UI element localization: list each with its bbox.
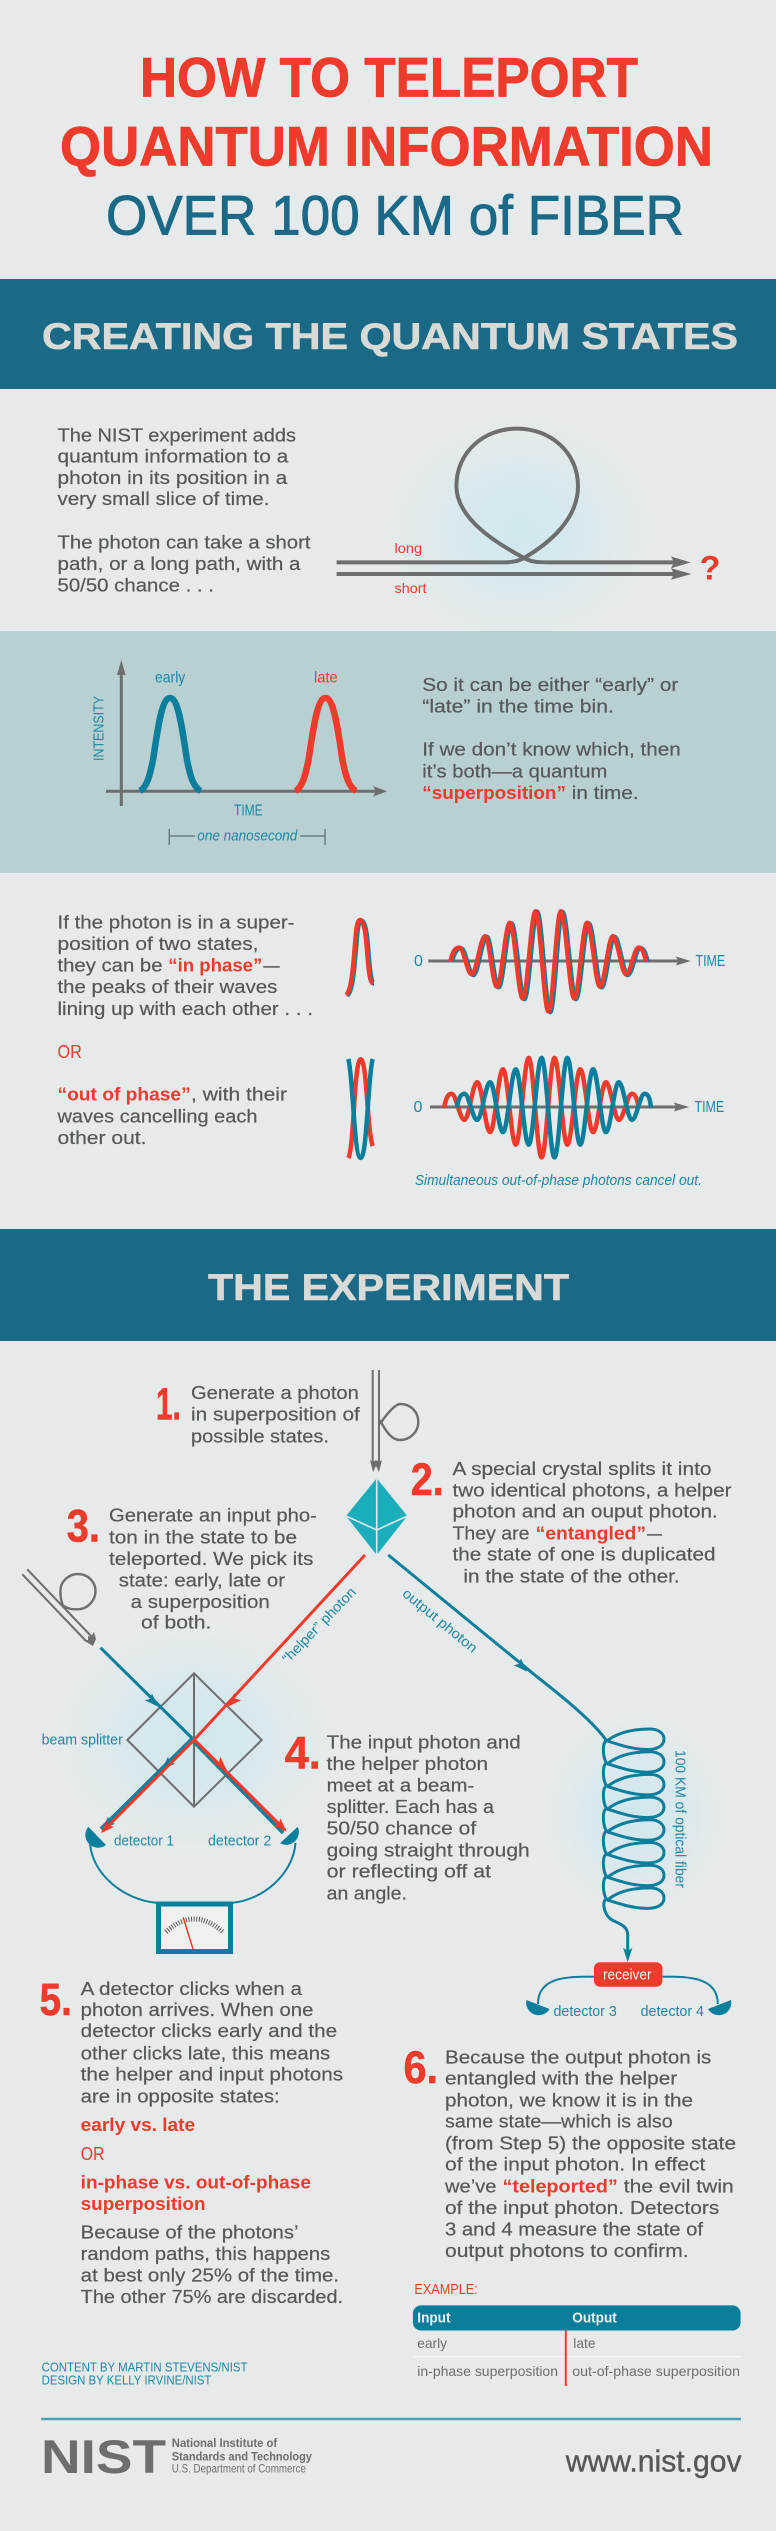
section heading: the experiment — [0, 1229, 776, 1341]
step 4: The input photon and — [327, 1731, 521, 1752]
step 5: early vs. late — [81, 2114, 195, 2135]
step 5: in-phase vs. out-of-phase — [81, 2171, 311, 2192]
step 6: the evil twin — [624, 2175, 734, 2196]
footer logo: NIST: NIST — [41, 2430, 166, 2483]
step 6: “teleported” — [502, 2175, 618, 2196]
text block: in phase or out of phase: If the photon is in a super- — [58, 912, 294, 932]
chart: intensity over time: late — [314, 669, 338, 686]
step 1: in superposition of — [191, 1404, 361, 1425]
step 4: 4. — [285, 1727, 321, 1778]
icon: source loop and arrows to crystal — [370, 1370, 418, 1472]
section heading: creating the quantum states — [0, 279, 776, 389]
title: QUANTUM INFORMATION — [60, 114, 713, 177]
icon: in-phase single peak — [346, 920, 374, 996]
footer url: www.nist.gov — [565, 2443, 742, 2478]
step 2: A special crystal splits it into — [452, 1458, 712, 1479]
step 4: going straight through — [327, 1839, 530, 1860]
text block: NIST experiment intro: quantum information to a — [58, 446, 289, 467]
panel: early or late time bin — [0, 631, 776, 873]
diagram: long and short paths: long — [394, 540, 422, 556]
example table: in-phase superposition — [417, 2363, 558, 2379]
glow: fiber coil — [535, 1705, 735, 1925]
step 5: OR — [81, 2143, 104, 2164]
text block: NIST experiment intro: The photon can take a short — [58, 532, 310, 553]
chart: out-of-phase wave — [414, 1058, 724, 1157]
receiver with detectors 3 and 4: detector 3 — [554, 2003, 617, 2020]
step 1: 1. — [156, 1378, 181, 1429]
example table: late — [573, 2335, 596, 2351]
text block: in phase or out of phase: position of two states, — [58, 933, 258, 954]
chart: intensity over time: TIME — [234, 803, 263, 820]
text block: in phase or out of phase: they can be — [58, 955, 162, 976]
text block: superposition in time — [422, 674, 681, 803]
text block: in phase or out of phase: “out of phase” — [58, 1084, 191, 1105]
text block: in phase or out of phase: lining up with each other . . . — [58, 998, 313, 1019]
step 5: The other 75% are discarded. — [81, 2286, 343, 2307]
step 4 — [285, 1727, 530, 1903]
text block: superposition in time: If we don’t know which, then — [422, 738, 681, 760]
step 5: superposition — [81, 2193, 206, 2214]
chart: intensity over time: early — [155, 669, 185, 686]
credits: DESIGN BY KELLY IRVINE/NIST — [42, 2372, 211, 2387]
step 6: 6. — [404, 2042, 438, 2093]
arrow: reflected photon to detector 2 — [194, 1740, 287, 1832]
step 5: Because of the photons’ — [81, 2222, 298, 2243]
icon: input photon source — [22, 1569, 96, 1646]
step 6: of the input photon. In effect — [445, 2154, 705, 2175]
chart: out-of-phase wave: 0 — [414, 1099, 423, 1116]
receiver with detectors 3 and 4 — [526, 1962, 731, 2020]
arrow: input photon path — [100, 1648, 283, 1833]
detectors 1 and 2 with wiring: detector 2 — [208, 1832, 271, 1849]
diagram: long and short paths: short — [394, 580, 427, 596]
step 4: the helper photon — [327, 1753, 488, 1774]
icon: crystal — [346, 1478, 407, 1555]
chart: in-phase wave: 0 — [414, 953, 423, 970]
step 6: entangled with the helper — [445, 2068, 677, 2089]
text block: NIST experiment intro — [58, 424, 310, 595]
chart: in-phase wave: TIME — [696, 953, 725, 970]
step 5: detector clicks early and the — [81, 2020, 337, 2041]
step 2: photon and an ouput photon. — [452, 1501, 718, 1522]
text block: NIST experiment intro: The NIST experiment adds — [58, 424, 296, 446]
label: beam splitter: beam splitter — [42, 1731, 123, 1748]
text block: in phase or out of phase: waves cancelling each — [56, 1106, 258, 1126]
step 3: a superposition — [131, 1591, 270, 1612]
text block: superposition in time: in time. — [572, 782, 639, 803]
step 2 — [411, 1454, 732, 1586]
example table: Output — [572, 2310, 617, 2327]
chart: intensity over time: INTENSITY — [90, 696, 107, 761]
step 6: (from Step 5) the opposite state — [445, 2132, 736, 2153]
step 5: random paths, this happens — [81, 2243, 330, 2264]
title: OVER 100 KM of FIBER — [106, 184, 684, 247]
step 4: 50/50 chance of — [327, 1818, 477, 1839]
arrow: reflected photon to detector 1 — [101, 1738, 192, 1830]
credits: CONTENT BY MARTIN STEVENS/NIST — [42, 2360, 248, 2374]
detectors 1 and 2 with wiring — [85, 1827, 299, 1903]
text block: NIST experiment intro: very small slice of time. — [58, 488, 269, 509]
credits — [42, 2360, 248, 2387]
step 2: the state of one is duplicated — [452, 1544, 716, 1565]
text block: superposition in time: “late” in the time bin. — [422, 695, 614, 716]
chart: intensity over time — [90, 660, 387, 845]
footer logo: NIST — [41, 2430, 312, 2483]
text block: in phase or out of phase — [56, 912, 313, 1148]
step 6: same state—which is also — [445, 2111, 673, 2132]
text block: in phase or out of phase: “in phase” — [168, 955, 262, 976]
text block: in phase or out of phase: , with their — [191, 1084, 287, 1105]
step 6: Because the output photon is — [445, 2046, 711, 2067]
title: HOW TO TELEPORT — [140, 46, 638, 109]
diagram: 100 km fiber coil: 100 KM of optical fiber — [672, 1750, 688, 1888]
step 1: Generate a photon — [191, 1382, 359, 1403]
text block: superposition in time: So it can be either “early” or — [422, 674, 678, 695]
receiver with detectors 3 and 4: receiver — [603, 1966, 652, 1983]
step 6: photon, we know it is in the — [445, 2089, 693, 2110]
step 5: A detector clicks when a — [81, 1978, 303, 1999]
step 5: 5. — [40, 1974, 72, 2025]
step 1 — [156, 1378, 361, 1446]
step 3: teleported. We pick its — [109, 1548, 313, 1569]
example table: Input — [417, 2310, 450, 2327]
step 4: an angle. — [327, 1882, 407, 1903]
icon: meter — [158, 1904, 230, 1952]
chart: out-of-phase wave: TIME — [694, 1099, 724, 1116]
icon: out-of-phase single peak — [348, 1059, 373, 1158]
step 3: Generate an input pho- — [109, 1505, 317, 1526]
step 5: photon arrives. When one — [81, 1999, 313, 2020]
arrow: helper photon path — [101, 1555, 365, 1833]
caption: out-of-phase photons cancel: Simultaneous out-of-phase photons cancel out. — [415, 1172, 702, 1189]
text block: in phase or out of phase: other out. — [58, 1127, 146, 1148]
text block: in phase or out of phase: — — [263, 955, 280, 976]
receiver with detectors 3 and 4: detector 4 — [641, 2003, 704, 2020]
text block: NIST experiment intro: path, or a long path, with a — [58, 553, 301, 574]
section heading: creating the quantum states: CREATING THE QUANTUM STATES — [42, 316, 738, 357]
step 4: meet at a beam- — [327, 1775, 474, 1796]
diagram: beam splitter — [127, 1673, 262, 1807]
text block: in phase or out of phase: OR — [58, 1041, 82, 1062]
step 6: output photons to confirm. — [445, 2240, 689, 2261]
chart: intensity over time: one nanosecond — [197, 828, 298, 845]
step 5: the helper and input photons — [81, 2064, 343, 2085]
text block: NIST experiment intro: photon in its position in a — [58, 467, 288, 488]
example table — [413, 2282, 741, 2386]
step 5: other clicks late, this means — [81, 2042, 330, 2063]
step 2: “entangled” — [536, 1522, 646, 1543]
step 5: at best only 25% of the time. — [81, 2265, 339, 2286]
step 2: They are — [452, 1522, 530, 1543]
step 4: splitter. Each has a — [327, 1796, 495, 1817]
step 5: are in opposite states: — [81, 2085, 280, 2106]
step 3: of both. — [141, 1611, 211, 1632]
step 2: 2. — [411, 1454, 444, 1505]
label: output photon: output photon — [400, 1585, 481, 1656]
step 6: of the input photon. Detectors — [445, 2197, 719, 2218]
diagram: long and short paths: ? — [700, 550, 720, 588]
step 6: we’ve — [444, 2175, 496, 2196]
example table: early — [417, 2335, 447, 2351]
text block: in phase or out of phase: the peaks of their waves — [58, 976, 277, 997]
step 3: 3. — [67, 1501, 100, 1552]
step 1: possible states. — [191, 1425, 329, 1446]
diagram: long and short paths — [337, 408, 720, 652]
step 5 — [40, 1974, 343, 2307]
glow: beam splitter — [44, 1615, 344, 1865]
text block: superposition in time: it’s both—a quantum — [422, 760, 607, 781]
step 3: state: early, late or — [119, 1570, 285, 1590]
text block: superposition in time: “superposition” — [422, 782, 566, 803]
footer logo: NIST: National Institute of — [172, 2436, 278, 2450]
step 6: 3 and 4 measure the state of — [445, 2218, 704, 2239]
section heading: the experiment: THE EXPERIMENT — [208, 1267, 569, 1308]
example table: out-of-phase superposition — [572, 2363, 740, 2379]
step 2: two identical photons, a helper — [452, 1479, 732, 1500]
step 2: — — [647, 1522, 662, 1543]
step 3: ton in the state to be — [109, 1526, 297, 1547]
chart: in-phase wave — [414, 911, 725, 1012]
diagram: 100 km fiber coil — [603, 1729, 688, 1962]
footer logo: NIST: Standards and Technology — [172, 2450, 312, 2464]
label: helper photon: “helper” photon — [279, 1584, 359, 1666]
step 2: in the state of the other. — [463, 1565, 680, 1586]
detectors 1 and 2 with wiring: detector 1 — [114, 1832, 174, 1849]
example table: EXAMPLE: — [414, 2282, 478, 2298]
step 6 — [404, 2042, 736, 2261]
arrow: output photon into fiber coil — [388, 1555, 607, 1741]
title — [60, 46, 713, 247]
text block: NIST experiment intro: 50/50 chance . . . — [58, 574, 214, 595]
footer logo: NIST: U.S. Department of Commerce — [172, 2461, 306, 2475]
step 3 — [67, 1501, 317, 1632]
step 4: or reflecting off at — [327, 1861, 491, 1882]
